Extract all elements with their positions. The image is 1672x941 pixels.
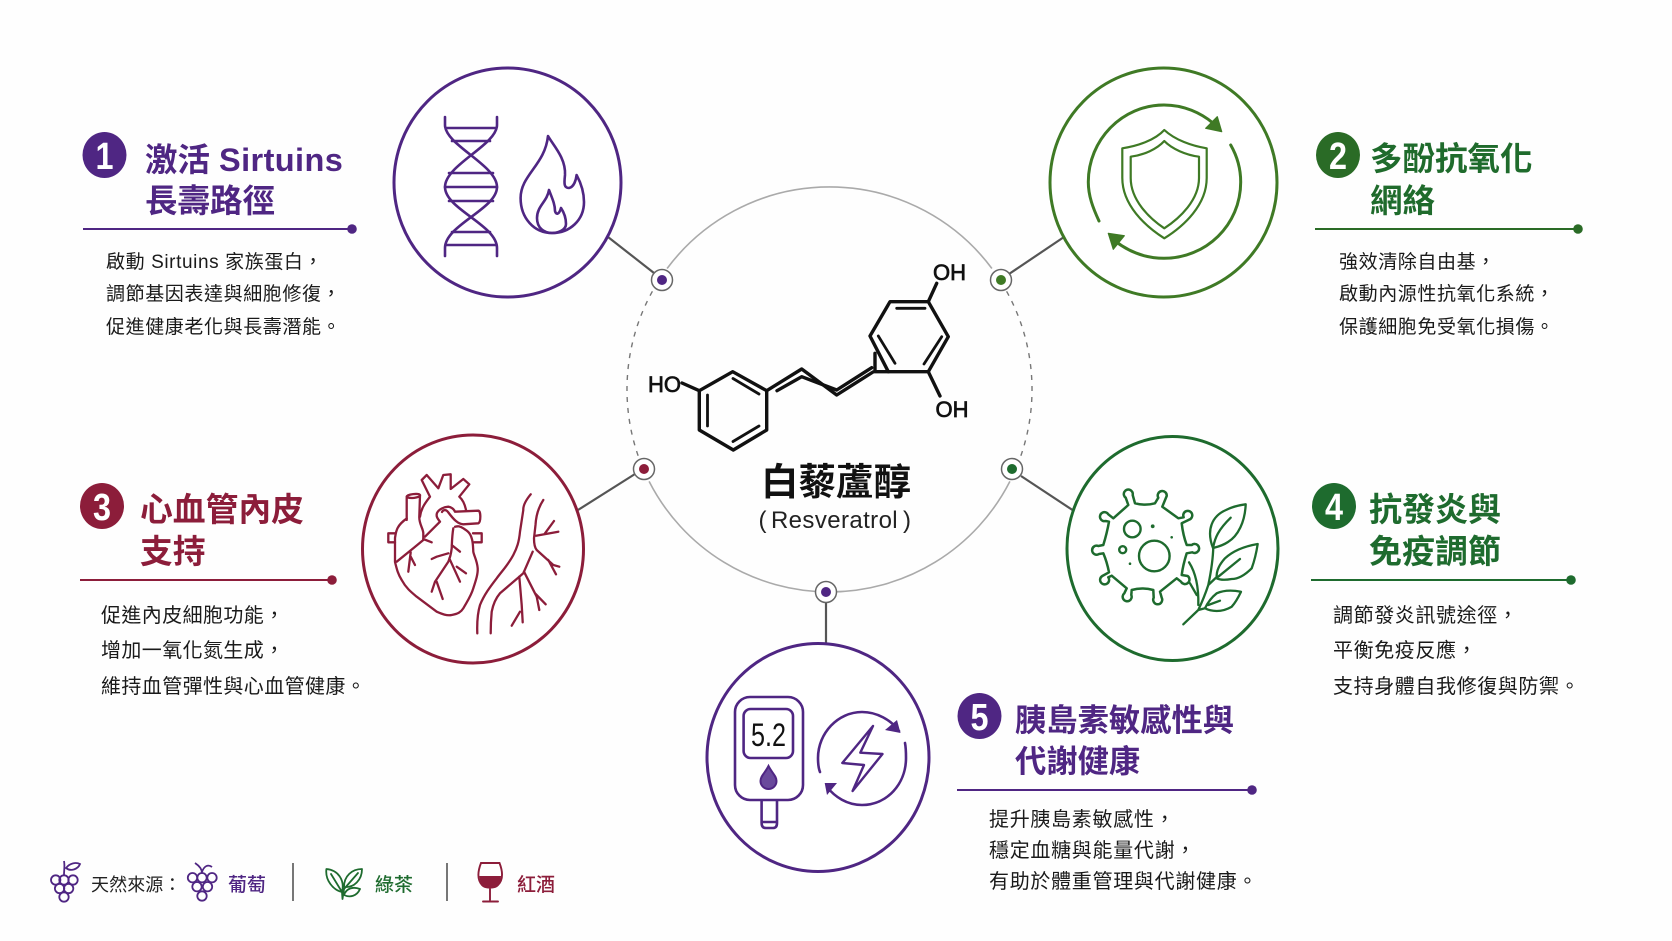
connector node: red <box>634 458 654 480</box>
heading rule 5 <box>957 785 1257 795</box>
heading 3: 心血管內皮 <box>140 491 304 528</box>
body text 3: 增加一氧化氮生成， <box>101 639 285 662</box>
heading 1: 長壽路徑 <box>145 183 275 219</box>
heading 5: 胰島素敏感性與 <box>1015 703 1234 738</box>
panel 2: antioxidant <box>1050 68 1583 338</box>
body text 4: 調節發炎訊號途徑， <box>1333 604 1518 627</box>
center title: 白藜蘆醇 <box>761 461 911 503</box>
molecule label: HO: HO <box>648 372 681 397</box>
body text 1: 促進健康老化與長壽潛能。 <box>106 316 341 338</box>
body text 5: 穩定血糖與能量代謝， <box>989 839 1196 862</box>
number badge 3 <box>80 483 124 529</box>
icon circle 1 <box>394 68 621 297</box>
molecule label: top OH: OH <box>933 260 966 285</box>
number badge 1: 1 <box>96 136 114 178</box>
icon: grape <box>188 863 217 901</box>
heading rule 1 <box>83 224 357 234</box>
body text 1: 調節基因表達與細胞修復， <box>106 283 341 305</box>
icon: flame <box>521 136 584 233</box>
resveratrol molecule <box>648 260 968 450</box>
heading 3: 支持 <box>140 533 206 570</box>
divider <box>446 863 448 901</box>
legend label: grape: 葡萄 <box>228 874 266 896</box>
connector node: green <box>990 270 1012 290</box>
body text 4: 支持身體自我修復與防禦。 <box>1333 675 1580 698</box>
body text 2: 保護細胞免受氧化損傷。 <box>1339 316 1555 338</box>
connector node: bottom purple <box>816 582 836 602</box>
icon: leaves <box>1183 504 1258 624</box>
icon circle 5 <box>707 644 929 872</box>
body text 2: 強效清除自由基， <box>1339 251 1496 273</box>
number badge 2 <box>1316 132 1360 178</box>
heading 5: 代謝健康 <box>1015 744 1140 779</box>
icon circle 2 <box>1050 68 1277 297</box>
legend intro text: 天然來源： <box>91 875 182 895</box>
heading 2: 網絡 <box>1370 183 1436 219</box>
heading rule 4 <box>1311 575 1576 585</box>
body text 3: 促進內皮細胞功能， <box>101 604 285 627</box>
legend label: red wine: 紅酒 <box>517 874 555 896</box>
icon: virus <box>1092 490 1199 604</box>
connector node: purple <box>652 270 672 290</box>
number badge 5 <box>958 693 1002 739</box>
number badge 5: 5 <box>970 697 988 739</box>
body text 4: 平衡免疫反應， <box>1333 638 1477 662</box>
icon: glucose meter <box>735 697 803 828</box>
body text 2: 啟動內源性抗氧化系統， <box>1339 283 1555 305</box>
central ring <box>627 187 1032 592</box>
body text 1: 啟動 Sirtuins 家族蛋白， <box>106 251 323 273</box>
icon circle 4 <box>1067 436 1278 660</box>
heading 2: 多酚抗氧化 <box>1370 141 1533 177</box>
body text 5: 提升胰島素敏感性， <box>989 808 1175 831</box>
body text 3: 維持血管彈性與心血管健康。 <box>101 675 366 698</box>
legend label: green tea: 綠茶 <box>375 874 413 896</box>
heading 4: 抗發炎與 <box>1369 491 1501 528</box>
number badge 1 <box>82 132 126 178</box>
heading 4: 免疫調節 <box>1369 533 1501 570</box>
icon circle 3 <box>362 435 584 663</box>
heading rule 2 <box>1315 224 1583 234</box>
legend: natural sources <box>51 861 555 902</box>
panel 5: insulin <box>707 644 1258 893</box>
panel 3: endothelial <box>80 435 584 698</box>
heading rule 3 <box>80 575 337 585</box>
connector lines <box>578 237 1074 643</box>
icon: DNA helix <box>445 117 497 256</box>
icon: heart <box>388 474 482 615</box>
center subtitle: (Resveratrol) <box>759 507 911 534</box>
icon: grape with leaf <box>51 861 80 902</box>
number badge 3: 3 <box>93 487 111 529</box>
icon: blood vessels <box>477 494 559 633</box>
panel 4: immune <box>1067 436 1580 698</box>
heading 1: 激活 Sirtuins <box>145 142 343 178</box>
number badge 4 <box>1312 483 1356 529</box>
molecule label: bottom OH: OH <box>936 397 968 422</box>
divider <box>292 863 294 901</box>
icon: shield with cycle arrows <box>1088 105 1241 258</box>
meter reading: 5.2 <box>751 717 786 753</box>
body text 5: 有助於體重管理與代謝健康。 <box>989 870 1258 893</box>
icon: wine glass <box>478 863 502 902</box>
number badge 4: 4 <box>1325 487 1343 529</box>
number badge 2: 2 <box>1329 136 1347 178</box>
icon: green tea leaves <box>326 869 362 899</box>
panel 1: Sirtuins <box>82 68 621 338</box>
icon: energy cycle bolt <box>818 712 906 805</box>
connector node: dark green <box>1002 458 1022 480</box>
